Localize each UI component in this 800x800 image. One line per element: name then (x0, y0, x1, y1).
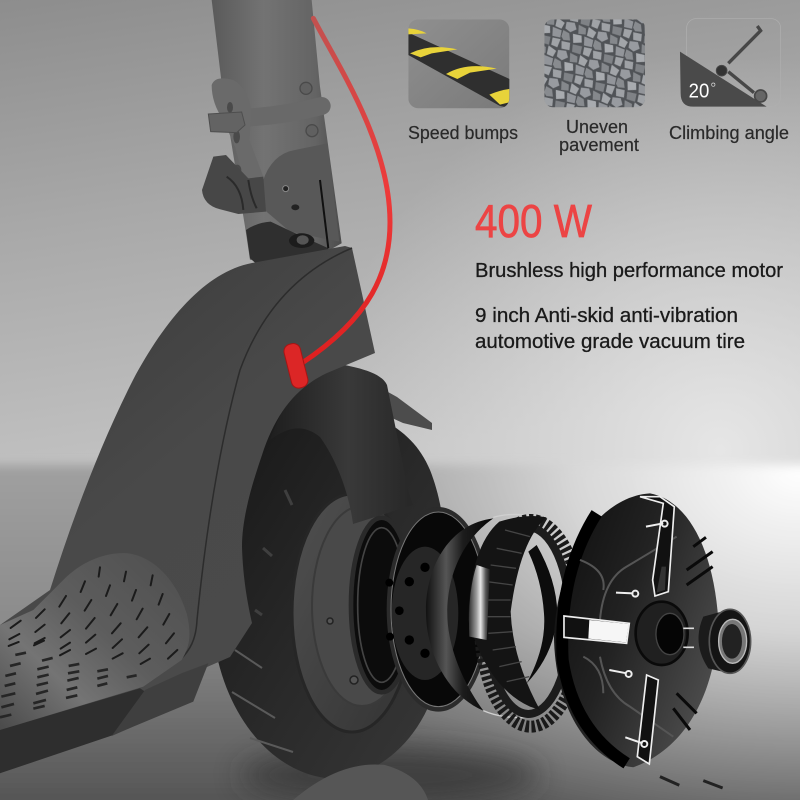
lever slots (227, 102, 241, 175)
stator block (468, 516, 547, 710)
hub inner ring (312, 506, 412, 706)
tread marks (232, 650, 293, 752)
motor cover disc (554, 493, 718, 767)
hub bore (656, 613, 684, 655)
hub (292, 494, 412, 732)
exploded motor (351, 493, 751, 788)
top slot (640, 497, 674, 596)
front fork (270, 360, 413, 524)
rim highlight (358, 528, 406, 682)
magnet band (426, 518, 493, 711)
inner black ring (527, 545, 557, 683)
rotor plate (392, 547, 458, 680)
bearing inner ring (719, 619, 747, 663)
rotor plate holes (385, 563, 430, 658)
yellow stripes (408, 28, 512, 105)
blurred foreground object (293, 764, 428, 800)
rotor edge highlight (391, 512, 486, 707)
label: speed bumps: Speed bumps (408, 122, 518, 143)
disc rim (562, 513, 627, 763)
label: climbing angle: Climbing angle (669, 122, 789, 143)
hub collar (636, 602, 688, 665)
label: uneven pavement: pavement (559, 134, 639, 155)
rotor cup (389, 509, 488, 709)
anti-slip plate (0, 553, 189, 730)
fender (0, 246, 375, 770)
tire description (475, 304, 745, 353)
gravel texture (544, 19, 645, 107)
tire (214, 400, 447, 778)
knob barrel (227, 177, 257, 210)
small hole (291, 204, 299, 210)
bearing body (698, 609, 730, 673)
tire description: automotive grade vacuum tire (475, 330, 745, 353)
icon: speed bump (408, 19, 512, 108)
collar (246, 222, 328, 264)
left slot (564, 616, 629, 643)
background wall (0, 0, 800, 480)
disc fins right (673, 537, 713, 730)
bearing bore (722, 624, 742, 659)
slope (680, 52, 767, 107)
rivets (609, 521, 668, 747)
stem tube (212, 0, 342, 260)
scooter stem and folding mechanism (202, 0, 342, 264)
rear mudguard tail (388, 392, 432, 430)
deck rear end (112, 663, 208, 736)
terrain icons (408, 19, 781, 108)
folding clamp body (263, 143, 339, 242)
loose screw 2 (703, 781, 723, 788)
degree sign (712, 83, 715, 86)
clamp band (251, 106, 322, 117)
band rim (483, 514, 540, 718)
front wheel (214, 400, 447, 778)
power heading: 400 W (475, 195, 593, 247)
motor description: Brushless high performance motor (475, 259, 783, 282)
label: uneven pavement (559, 116, 639, 155)
outer rim (351, 518, 412, 692)
angle label: 20 (689, 80, 709, 103)
folding lever (212, 78, 263, 190)
stator chrome band (469, 565, 490, 640)
lock button cap (297, 235, 309, 245)
tire upper sipes (255, 490, 292, 615)
lock button (289, 233, 314, 248)
floor shadow under the wheel (240, 747, 540, 800)
flat grip dashes (0, 653, 137, 717)
icon: gravel (544, 19, 645, 107)
icon frame (687, 19, 781, 107)
left slot white insert (588, 620, 629, 642)
plate grip dashes (9, 567, 177, 664)
folding knob (202, 155, 266, 214)
top slot window (657, 567, 666, 593)
stator laminations (485, 530, 530, 682)
stator ring body (487, 527, 570, 714)
stator teeth ring (480, 520, 581, 727)
scooter on slope (716, 26, 767, 102)
hub screws (327, 618, 358, 684)
red safety cable (282, 18, 390, 390)
stem bolts (300, 82, 318, 137)
lever thumb grip (208, 112, 245, 133)
wall glow (250, 60, 800, 480)
loose screw 1 (660, 777, 679, 785)
cable tag (282, 342, 309, 390)
disc ribs (580, 537, 677, 737)
fender seam (180, 248, 352, 660)
cable (302, 18, 390, 363)
bump body (408, 33, 512, 108)
label: uneven pavement: Uneven (566, 116, 628, 137)
clamp pivot (283, 186, 289, 192)
deck side rail (0, 688, 145, 773)
bottom slot (637, 675, 658, 764)
road surface (408, 19, 509, 108)
floor (0, 465, 800, 800)
tire description: 9 inch Anti-skid anti-vibration (475, 304, 738, 327)
clamp slot (320, 180, 328, 248)
icon: climbing angle (680, 19, 781, 107)
axle pins (683, 628, 694, 647)
bearing face (709, 609, 751, 673)
deck (0, 553, 208, 773)
